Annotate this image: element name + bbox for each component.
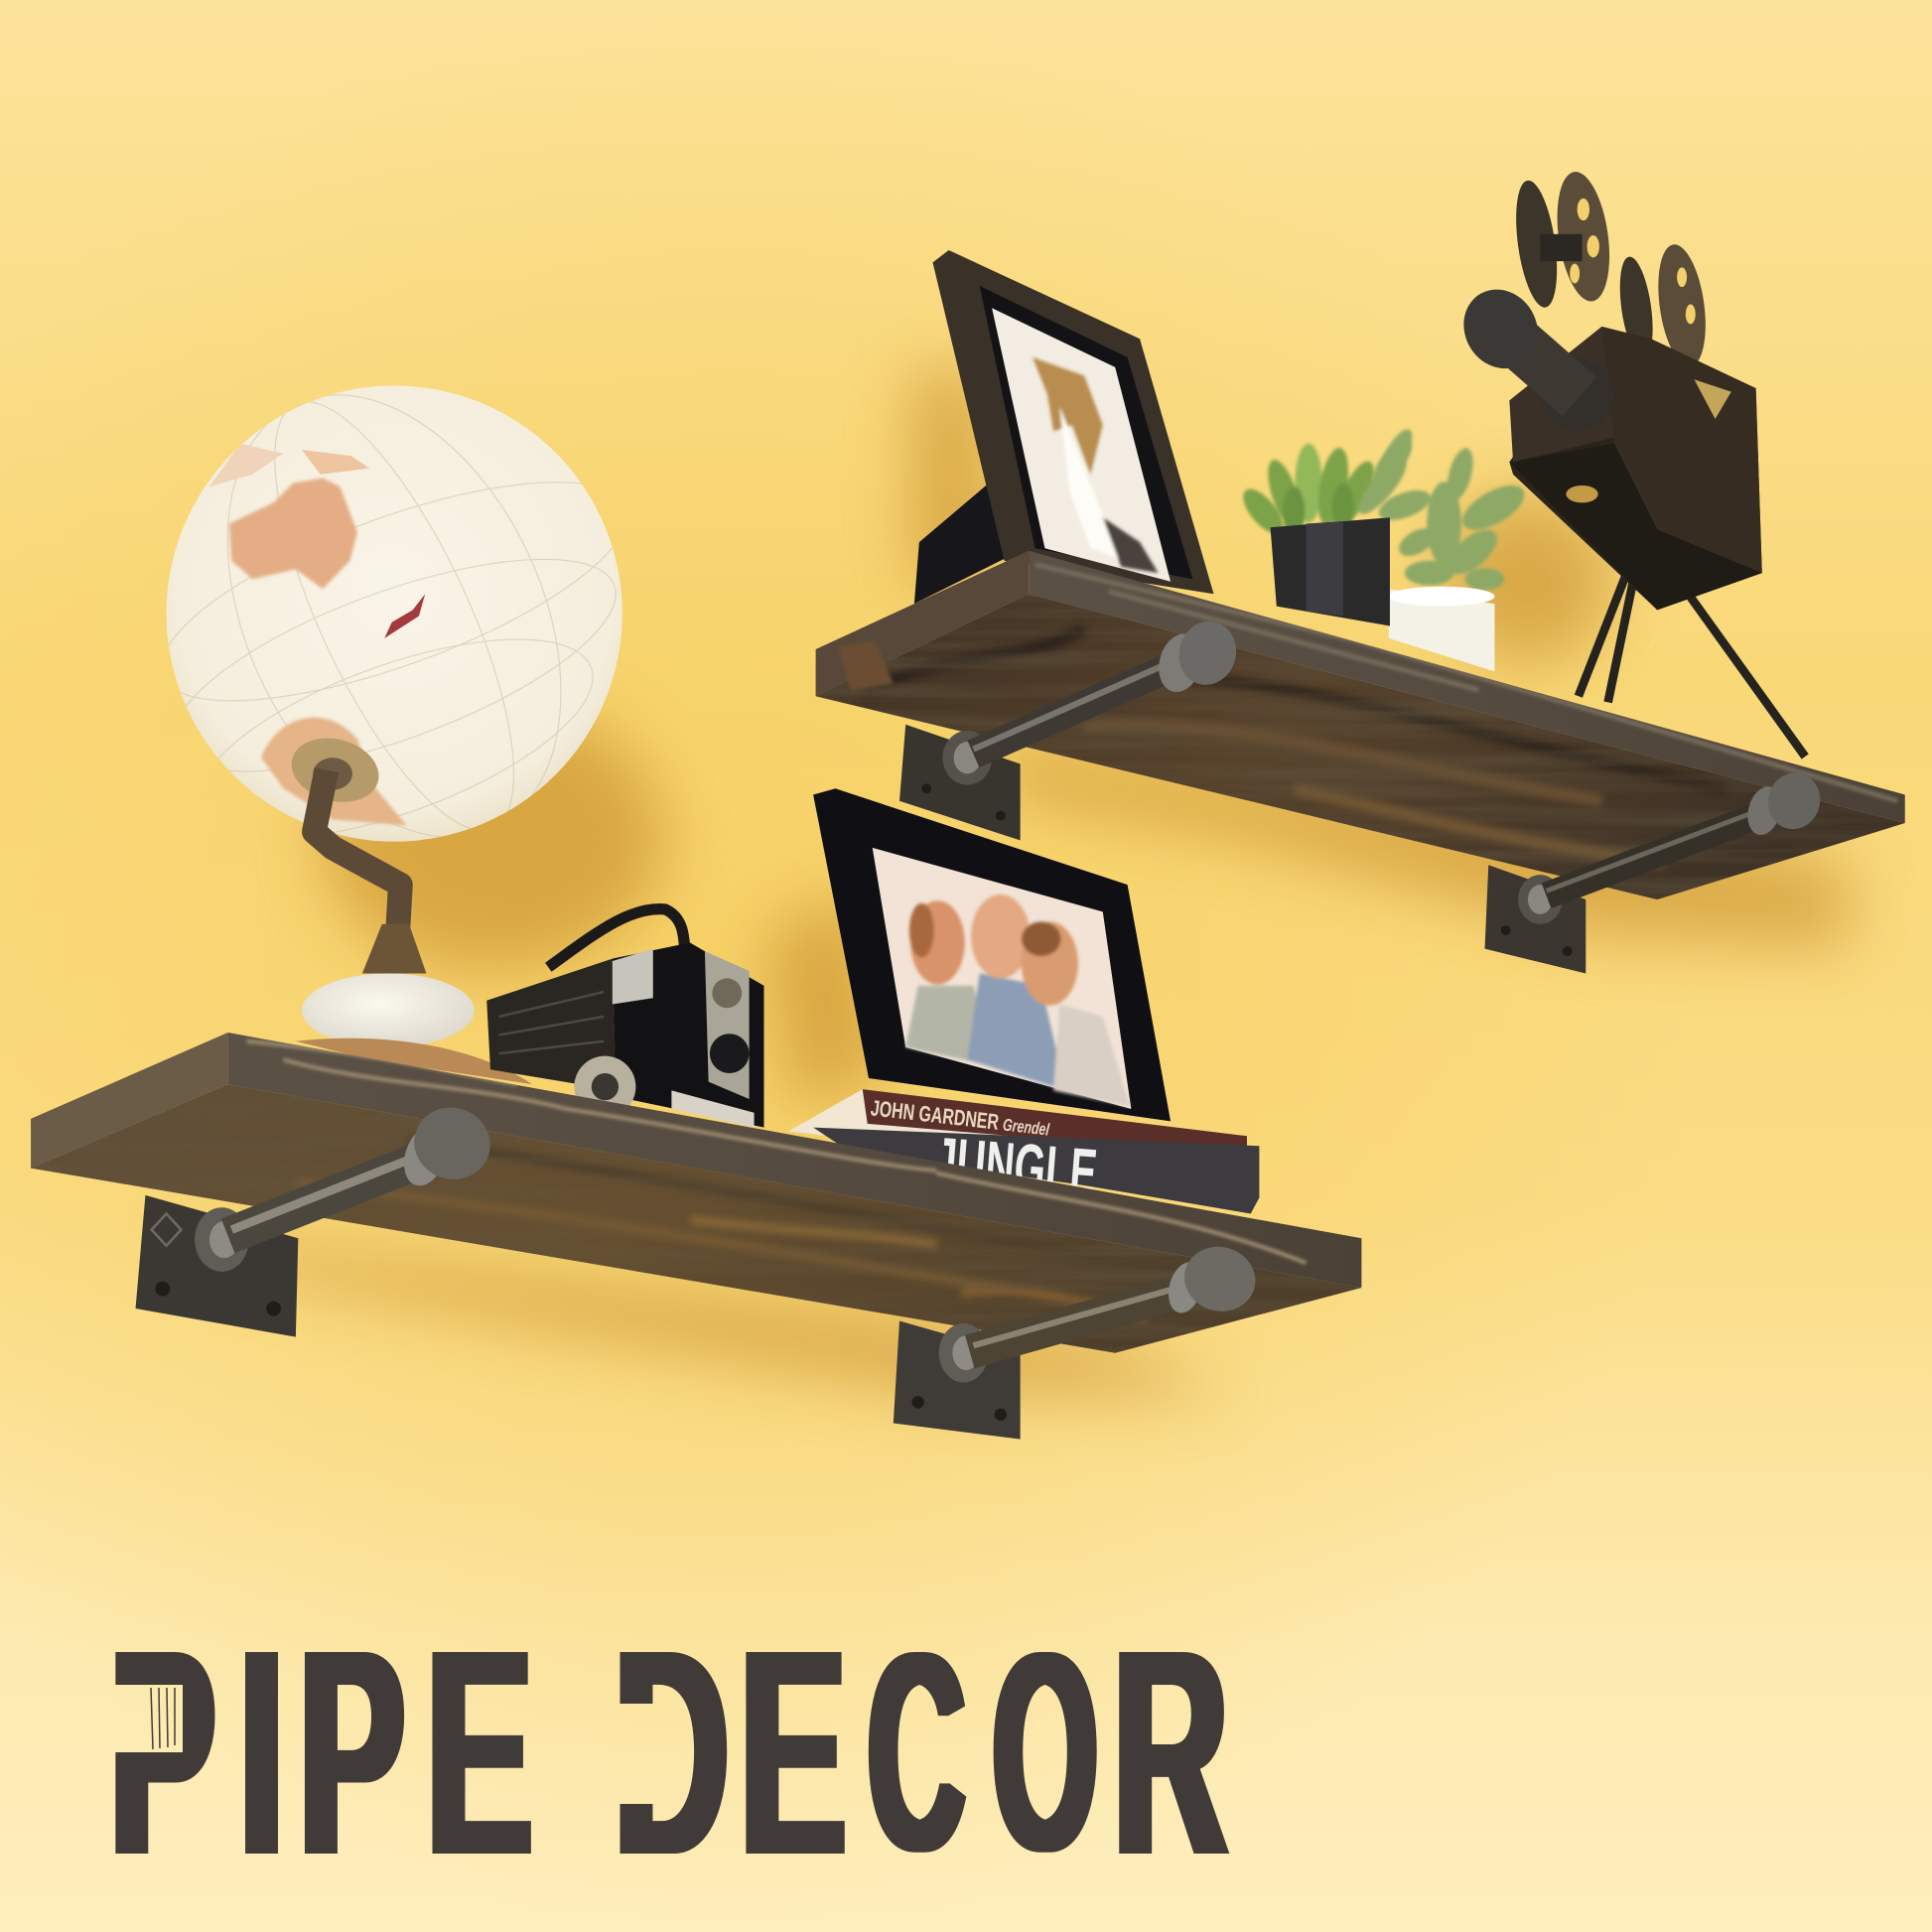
Australia [229,479,357,589]
shelf plate left [899,725,1021,840]
succulent in black pot [1236,425,1418,625]
shelf wood [816,551,1905,899]
brand wordmark: DE [615,1589,846,1916]
tripod [1579,542,1805,757]
globe wood base [296,1038,532,1084]
brand wordmark [109,1589,1228,1916]
globe [167,385,622,842]
pipe right [939,1239,1263,1383]
pipe left [942,615,1243,785]
projector body [1509,327,1762,610]
shelf wood [31,1033,1361,1353]
book title: Grendel: JOHN GARDNER Grendel [870,1095,1051,1141]
axis cap [284,729,386,811]
photo scene [31,169,1905,1440]
children [905,895,1130,1107]
bottom shelf [31,342,1361,1440]
New Zealand [384,594,425,638]
wall shadows [160,369,1849,1392]
wordmark notches [109,1685,657,1804]
white pot with plant [1366,434,1531,671]
book title: The Jungle: JUNGLE [931,1124,1100,1210]
vintage camera [486,909,763,1128]
globe grid [169,394,617,837]
film reels [1509,169,1713,369]
projector lens [1449,276,1614,431]
brand wordmark: O [993,1593,1097,1910]
film projector [1449,169,1805,757]
frame stand [914,481,1013,604]
shelf plate right [894,1320,1021,1440]
shelf plate right [1485,865,1586,973]
brand wordmark: R [1114,1589,1228,1916]
pipe right [1518,766,1827,924]
pipe left [195,1098,499,1272]
globe ceramic base [302,973,475,1047]
camera strap [548,909,685,967]
brand wordmark: PIPE [110,1589,532,1916]
Antarctica [261,718,407,826]
camera front panel [705,951,750,1099]
shelf plate left [136,1195,298,1337]
top shelf [816,169,1905,973]
stacked books [788,1089,1259,1213]
picture frame with dog photo [914,250,1213,604]
globe stand [314,770,426,973]
Asia fragment [209,444,283,486]
brand wordmark: C [868,1593,965,1910]
picture frame with children [813,788,1171,1121]
dog [1033,357,1159,573]
